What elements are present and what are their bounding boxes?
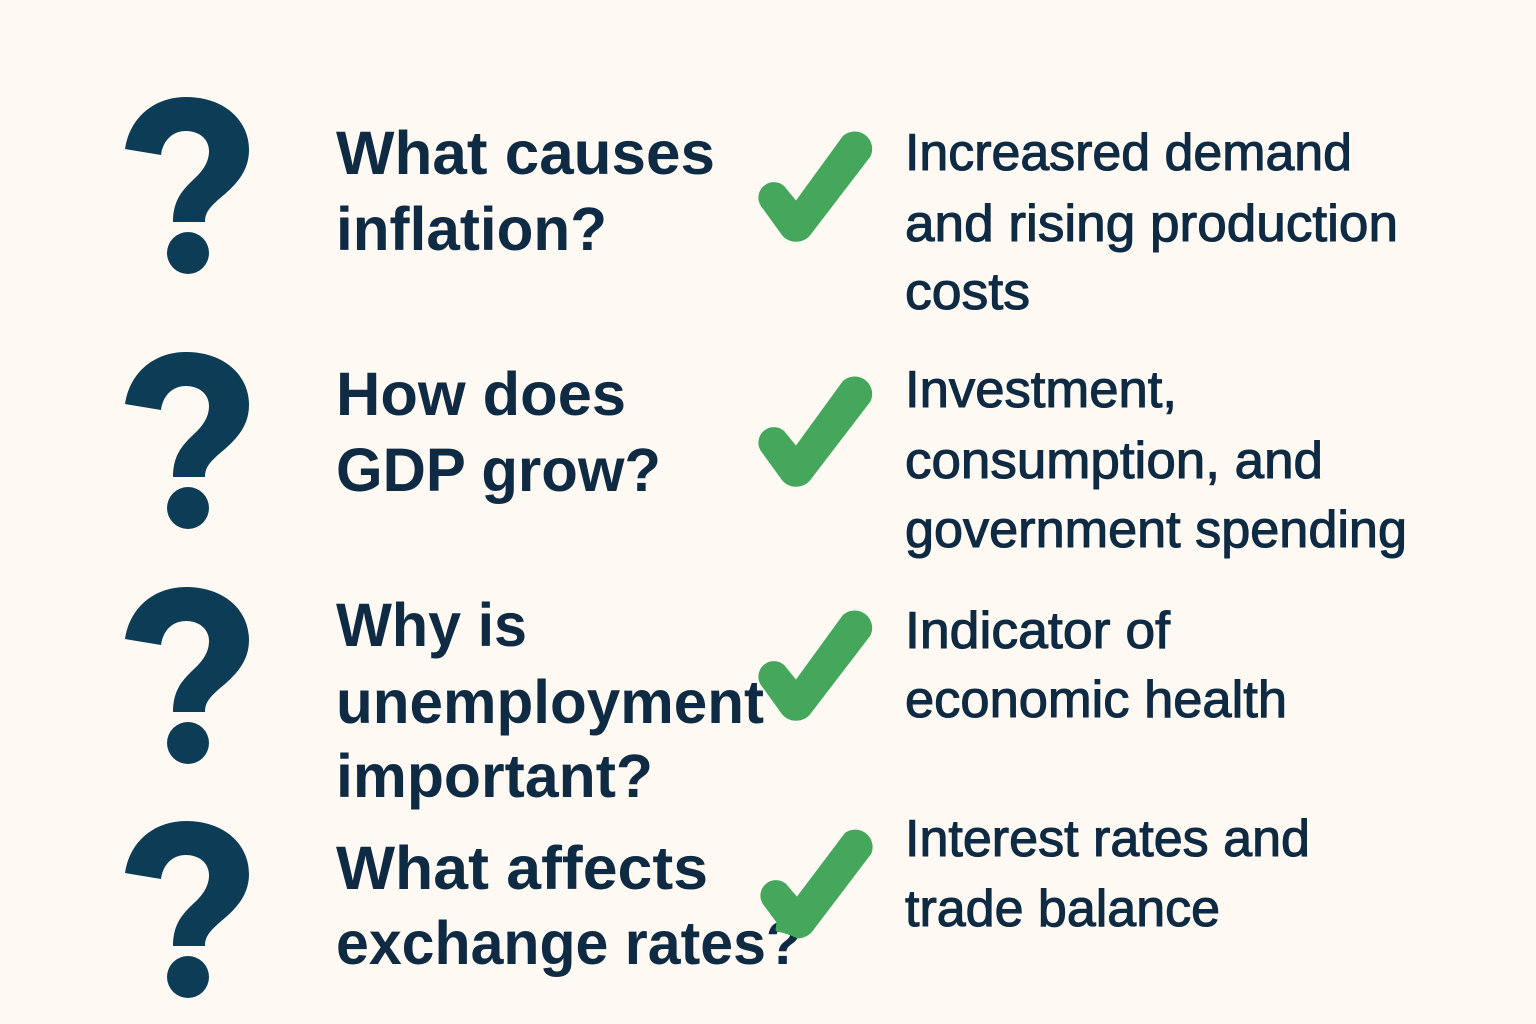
question 3: important? <box>336 742 653 810</box>
question 1: What causes <box>336 119 715 187</box>
icon: question mark 1 <box>125 97 249 274</box>
row 1: what causes inflation <box>125 97 1398 321</box>
icon: check mark 2 <box>760 378 871 485</box>
answer 3: Indicator of <box>905 602 1171 660</box>
answer 1: and rising production <box>905 195 1398 253</box>
row 3: why is unemployment important <box>125 587 1287 810</box>
icon: check mark 4 <box>762 831 871 937</box>
question 2: How does <box>336 360 626 428</box>
icon: question mark 4 <box>125 821 249 998</box>
answer 4: trade balance <box>905 880 1220 938</box>
answer 1: Increasred demand <box>905 124 1352 182</box>
answer 3: economic health <box>905 671 1287 729</box>
answer 4: Interest rates and <box>905 810 1310 868</box>
question 4 <box>336 834 802 977</box>
icon: question mark 3 <box>125 587 249 764</box>
question 3: Why is <box>336 591 527 659</box>
row 4: what affects exchange rates <box>125 810 1310 998</box>
icon: check mark 3 <box>760 612 871 719</box>
question 3: unemployment <box>336 668 764 736</box>
question 2 <box>336 360 661 504</box>
answer 1: costs <box>905 263 1030 321</box>
question 4: exchange rates? <box>336 909 802 977</box>
answer 2: consumption, and <box>905 432 1323 490</box>
question 2: GDP grow? <box>336 436 661 504</box>
icon: question mark 2 <box>125 352 249 529</box>
question 1 <box>336 119 715 263</box>
answer 2: government spending <box>905 501 1407 559</box>
answer 1 <box>905 124 1398 321</box>
question 1: inflation? <box>336 195 607 263</box>
question 4: What affects <box>336 834 708 902</box>
answer 2: Investment, <box>905 361 1177 419</box>
icon: check mark 1 <box>760 133 871 240</box>
question 3 <box>336 591 764 810</box>
answer 3 <box>905 602 1287 729</box>
answer 4 <box>905 810 1310 938</box>
answer 2 <box>905 361 1407 559</box>
row 2: how does GDP grow <box>125 352 1407 559</box>
